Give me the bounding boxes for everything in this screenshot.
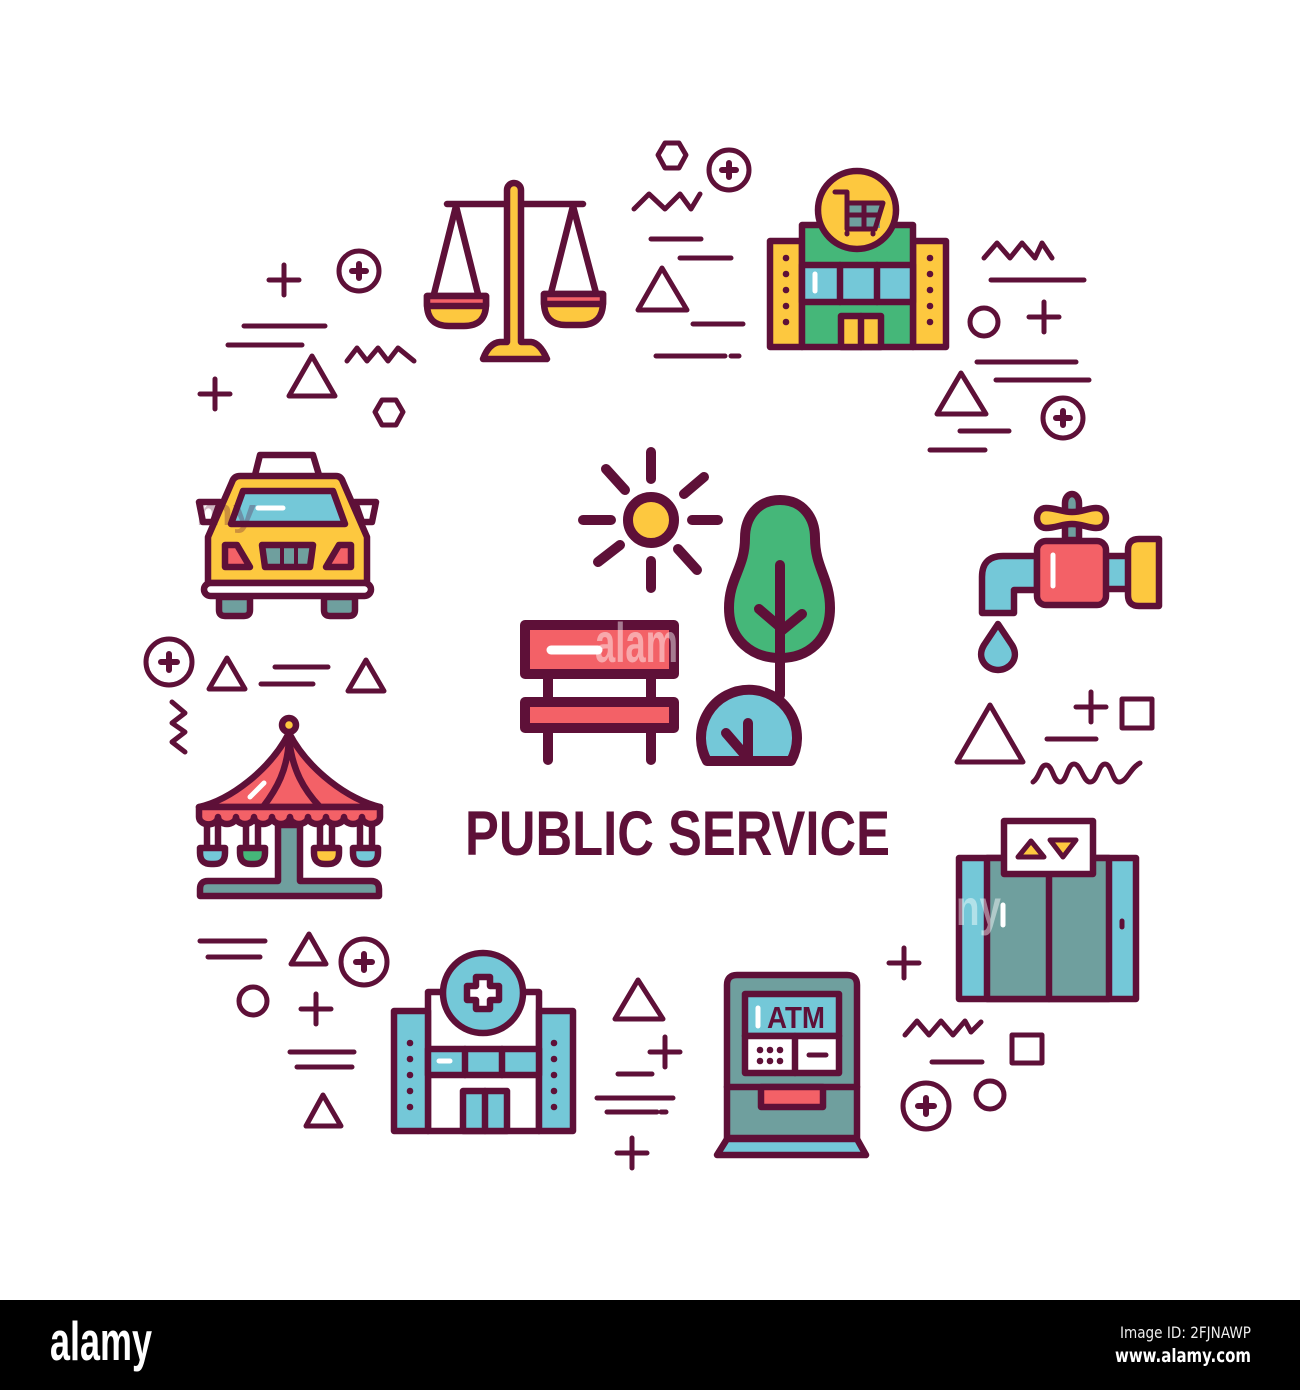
icon: tree and bush — [701, 500, 830, 761]
icon: park bench — [525, 625, 674, 760]
title: PUBLIC SERVICE — [465, 799, 890, 869]
decor: top left shapes — [200, 251, 414, 425]
image id: Image ID: 2FJNAWP — [1120, 1323, 1251, 1342]
icon: shopping centre with cart — [770, 171, 946, 347]
icon: chain carousel — [199, 718, 380, 896]
decor: bottom left shapes — [200, 934, 387, 1126]
footer bar — [0, 1300, 1300, 1390]
decor: top right shapes — [930, 243, 1089, 450]
decor: left middle shapes — [146, 639, 384, 752]
icon: water tap — [981, 494, 1159, 670]
decor: bottom centre shapes — [597, 980, 680, 1168]
watermark fragments: ny — [956, 880, 1001, 936]
icon: hospital building — [394, 953, 573, 1131]
decor: right middle shapes — [957, 692, 1152, 782]
icon: elevator — [959, 821, 1136, 999]
decor: bottom right shapes — [889, 948, 1042, 1129]
watermark fragments: alam — [595, 611, 678, 674]
icon: scales of justice — [427, 183, 603, 359]
icon: sun — [583, 452, 718, 588]
footer logo: alamy — [50, 1310, 152, 1372]
icon: ATM machine: ATM — [767, 1000, 825, 1035]
watermark fragments: my — [196, 492, 256, 534]
watermark fragments — [196, 492, 1001, 936]
icon: taxi car — [199, 455, 376, 616]
decor: top centre shapes — [634, 143, 749, 356]
icon: ATM machine — [717, 975, 866, 1155]
website: www.alamy.com — [1115, 1345, 1251, 1367]
